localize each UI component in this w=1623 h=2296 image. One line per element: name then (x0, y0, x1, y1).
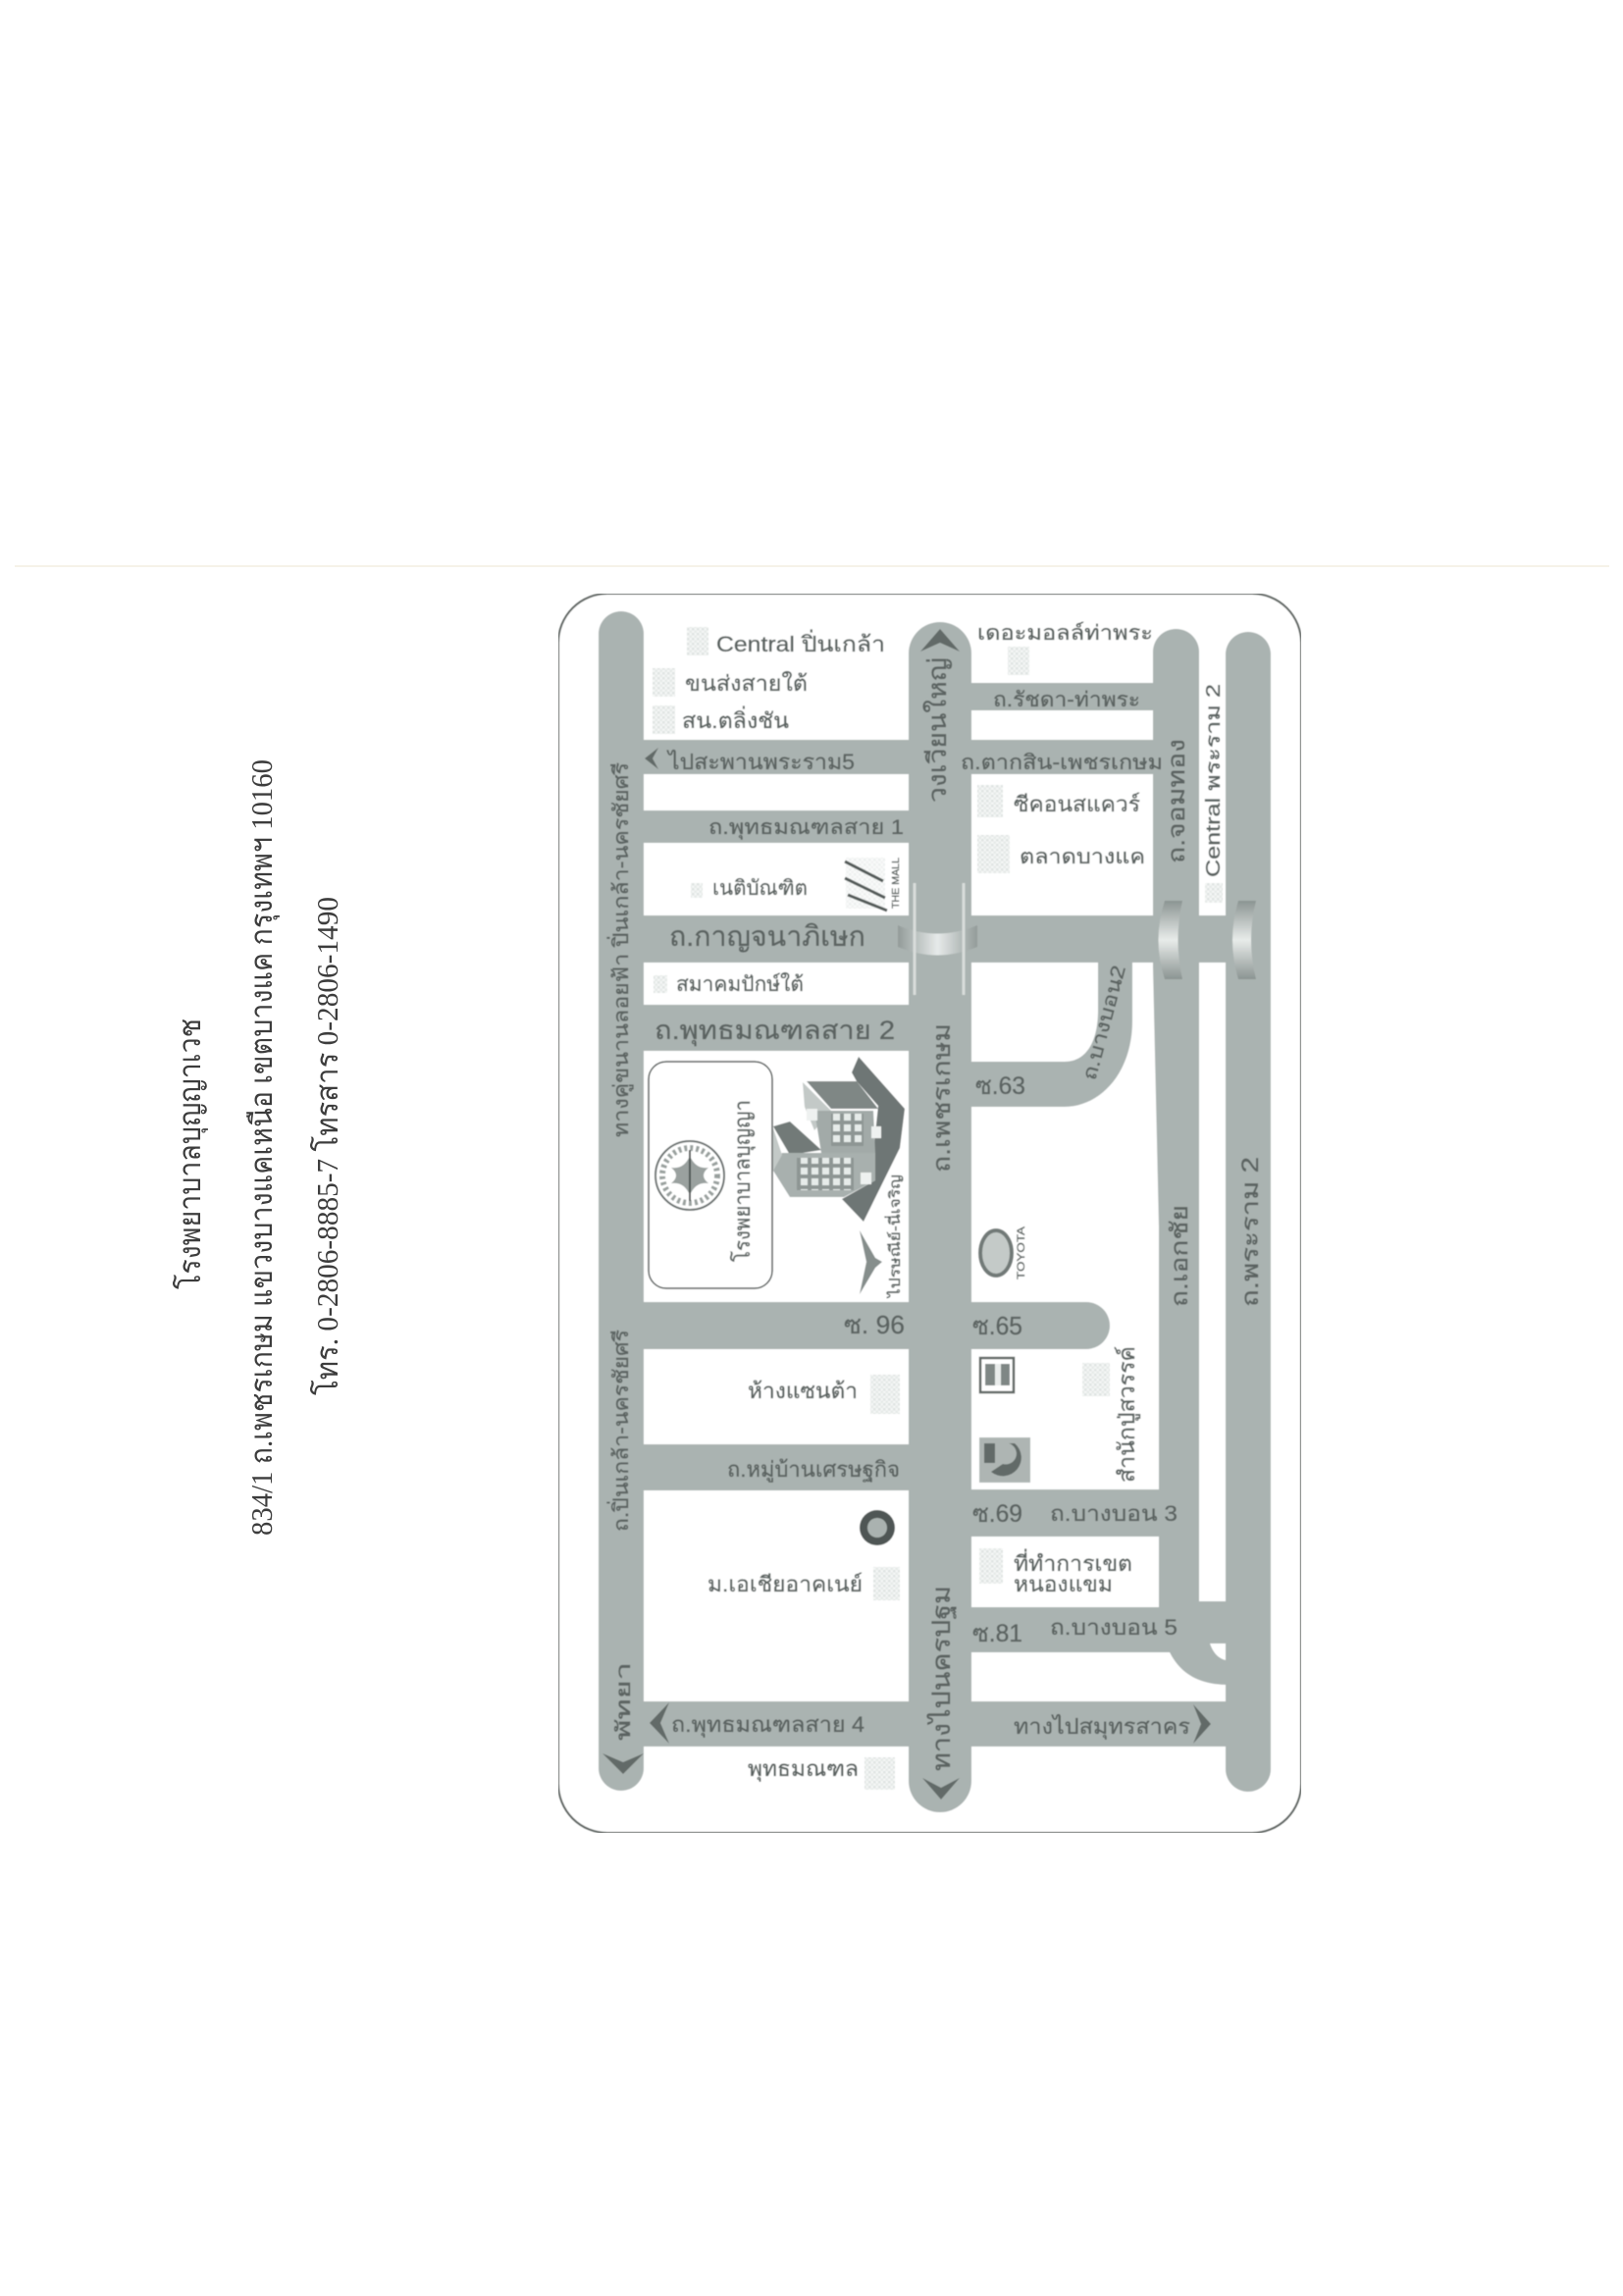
road and place labels: ถ.พระราม 2 (1237, 1157, 1264, 1307)
icon: crescent logo (979, 1437, 1030, 1483)
road and place labels: ทางไปนครปฐม (926, 1586, 957, 1771)
heading: hospital name: โรงพยาบาลบุญญาเวช (173, 1018, 209, 1289)
road and place labels: ถ.ตากสิน-เพชรเกษม (961, 752, 1163, 774)
road and place labels: เดอะมอลล์ท่าพระ (977, 621, 1153, 645)
road and place labels: ซ.63 (975, 1072, 1025, 1100)
road and place labels: ถ.กาญจนาภิเษก (669, 921, 865, 953)
icon: 7-Eleven logo (980, 1358, 1014, 1392)
road and place labels: ซ.65 (972, 1311, 1022, 1340)
road and place labels: ถ.ปิ่นเกล้า-นครชัยศรี (606, 1330, 633, 1532)
road and place labels: ทางคู่ขนานลอยฟ้า ปิ่นเกล้า-นครชัยศรี (606, 762, 634, 1137)
icon: Toyota logo: TOYOTA (1016, 1226, 1027, 1279)
icon: hospital building (773, 1057, 905, 1222)
icon: small pagoda logo (860, 1230, 882, 1294)
text block: address: 834/1 ถ.เพชรเกษม แขวงบางแคเหนือ เขตบางแค กรุงเทพฯ 10160 (244, 759, 281, 1536)
road and place labels: ซีคอนสแควร์ (1014, 792, 1140, 816)
road and place labels: ตลาดบางแค (1020, 846, 1145, 868)
road and place labels: ไปรษณีย์-นี่เจริญ (884, 1174, 904, 1298)
arrow: right to Samut Sakhon (1193, 1704, 1211, 1744)
road and place labels: ซ.81 (972, 1620, 1022, 1647)
road and place labels: ถ.หมู่บ้านเศรษฐกิจ (727, 1457, 900, 1483)
hospital callout box: โรงพยาบาลบุญญา (730, 1100, 756, 1262)
hospital callout box (649, 1062, 772, 1288)
road and place labels: สำนักปู่สวรรค์ (1114, 1346, 1140, 1483)
overpass: Chom Thong (1158, 901, 1182, 979)
road and place labels: ถ.บางบอน 5 (1050, 1615, 1178, 1640)
overpass: Rama 2 (1232, 901, 1256, 979)
curved junction island (1210, 1644, 1226, 1660)
road and place labels: ถ.บางบอน 3 (1050, 1501, 1178, 1526)
road and place labels: ถ.บางบอน2 (1079, 964, 1130, 1082)
icon: dark round bank logo (860, 1510, 895, 1545)
road and place labels: ซ. 96 (844, 1310, 905, 1339)
road and place labels: สมาคมปักษ์ใต้ (676, 972, 804, 996)
road and place labels: หนองแขม (1014, 1572, 1113, 1596)
arrow: down to Nakhon Pathom (922, 1778, 960, 1800)
icon: Toyota logo (980, 1226, 1027, 1279)
road and place labels: Central พระราม 2 (1203, 684, 1225, 877)
map frame (558, 594, 1301, 1833)
road and place labels: ม.เอเชียอาคเนย์ (707, 1572, 863, 1596)
arrow: up to Wongwian Yai (920, 629, 960, 652)
road and place labels: ไปสะพานพระราม5 (666, 750, 855, 774)
road and place labels: ห้างแซนต้า (748, 1379, 858, 1403)
overpass: Phetkasem and Kanchanaphisek (898, 883, 977, 995)
road network (599, 611, 1271, 1812)
road and place labels: ถ.พุทธมณฑลสาย 2 (654, 1016, 895, 1047)
road and place labels: พุทธมณฑล (748, 1756, 859, 1782)
road and place labels: พัทยา (613, 1662, 635, 1741)
road and place labels (606, 621, 1264, 1782)
scan fold line (15, 565, 1609, 567)
road and place labels: ถ.พุทธมณฑลสาย 1 (708, 816, 904, 840)
road and place labels: ถ.รัชดา-ท่าพระ (993, 689, 1140, 711)
road and place labels: ซ.69 (972, 1500, 1022, 1528)
road and place labels: ถ.เอกชัย (1167, 1205, 1193, 1307)
road and place labels: ที่ทำการเขต (1014, 1548, 1132, 1576)
arrow: left on Phutthamonthon 4 (650, 1702, 669, 1744)
icon: The Mall logo (845, 858, 902, 911)
road and place labels: สน.ตลิ่งชัน (682, 705, 789, 733)
icon: hospital seal (655, 1141, 724, 1210)
icon: The Mall logo: THE MALL (891, 858, 902, 909)
road and place labels: ขนส่งสายใต้ (685, 671, 808, 696)
arrow: down to Pattaya (602, 1753, 644, 1774)
road and place labels: ทางไปสมุทรสาคร (1014, 1714, 1190, 1740)
text block: phone and fax: โทร. 0-2806-8885-7 โทรสาร 0-2806-1490 (310, 897, 344, 1395)
landmark icons (653, 627, 1223, 1790)
road and place labels: วงเวียนใหญ่ (922, 657, 952, 803)
arrow: left to Rama 5 bridge (645, 748, 658, 769)
road and place labels: Central ปิ่นเกล้า (716, 629, 885, 656)
road and place labels: ถ.เพชรเกษม (928, 1023, 956, 1173)
road and place labels: ถ.จอมทอง (1164, 739, 1190, 863)
panel: location map (558, 594, 1301, 1833)
road and place labels: เนติบัณฑิต (712, 877, 808, 900)
road and place labels: ถ.พุทธมณฑลสาย 4 (671, 1712, 864, 1738)
